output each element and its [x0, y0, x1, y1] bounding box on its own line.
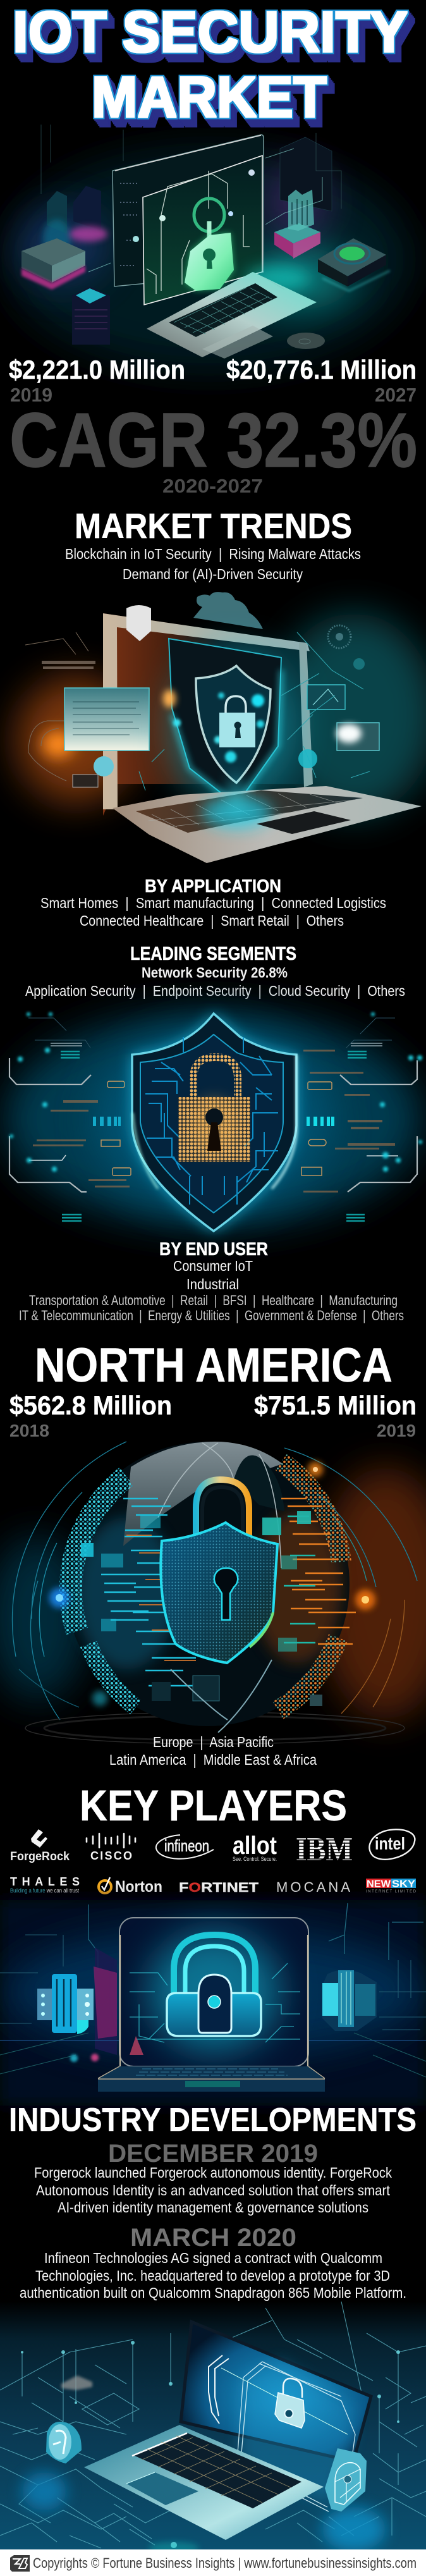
panel: by end user [19, 1239, 404, 1323]
logo: Norton: Norton [115, 1878, 162, 1896]
development 1 line 2: Autonomous Identity is an advanced solution that offers smart [36, 2182, 391, 2199]
heading: by end user: BY END USER [159, 1239, 268, 1260]
end user: industrial: Industrial [186, 1276, 239, 1292]
other regions line 2: Latin America | Middle East & Africa [109, 1751, 317, 1768]
logo: IBM: IBM [296, 1831, 353, 1868]
logo: Mocana: MOCANA [276, 1879, 350, 1895]
logo: Fortinet: FORTINET [179, 1880, 259, 1895]
logo: New Sky: SKY [392, 1879, 415, 1889]
title line 1: IOT SECURITY [13, 0, 408, 64]
panel: market trends [65, 506, 361, 582]
illustration: globe with padlock [0, 1442, 426, 1744]
logo: Infineon: infineon [164, 1836, 209, 1855]
heading: key players: KEY PLAYERS [80, 1781, 347, 1830]
logo: Thales: Building a future we can all trust [10, 1887, 79, 1894]
logo: Thales [10, 1875, 80, 1894]
logo: Norton [99, 1877, 162, 1896]
year 2019: 2019 [10, 384, 52, 406]
panel: by application [40, 876, 386, 929]
panel: leading segments [25, 943, 405, 999]
year 2027: 2027 [375, 384, 417, 406]
illustration: laptop with green padlock [6, 125, 411, 370]
illustration: shield on laptop [16, 592, 426, 863]
heading: by application: BY APPLICATION [145, 876, 281, 897]
stat 2019 value: $751.5 Million [254, 1390, 417, 1420]
CAGR period: 2020-2027 [162, 475, 263, 497]
logo: Cisco [87, 1834, 135, 1862]
leading segment value: Network Security 26.8% [142, 964, 288, 981]
title line 2 wrapper: MARKET [92, 65, 327, 130]
end user: consumer: Consumer IoT [173, 1258, 253, 1274]
other regions line 1: Europe | Asia Pacific [153, 1734, 274, 1750]
logo: intel [369, 1829, 415, 1860]
panel: hero [6, 0, 411, 370]
date: december 2019: DECEMBER 2019 [108, 2140, 318, 2168]
footer logo [10, 2555, 30, 2572]
stat 2019 value: $2,221.0 Million [9, 355, 185, 384]
logo: Thales: THALES [10, 1875, 80, 1888]
year 2018: 2018 [9, 1421, 49, 1440]
logo: New Sky: NEW [367, 1879, 391, 1889]
logo: New Sky [366, 1879, 417, 1894]
logo: intel: intel [375, 1834, 405, 1853]
date: march 2020: MARCH 2020 [130, 2224, 296, 2252]
logo: New Sky: INTERNET LIMITED [366, 1890, 417, 1894]
panel: key players [10, 1781, 417, 1896]
stat 2018 value: $562.8 Million [9, 1390, 172, 1420]
logo: allot: allot [233, 1832, 277, 1860]
logo: Cisco: CISCO [90, 1849, 132, 1862]
trends line 1: Blockchain in IoT Security | Rising Malware Attacks [65, 546, 361, 562]
panel: market size [9, 355, 417, 497]
logo: ForgeRock [10, 1829, 70, 1863]
logo: ForgeRock: ForgeRock [10, 1850, 70, 1863]
footer [0, 2549, 426, 2576]
heading: leading segments: LEADING SEGMENTS [130, 943, 296, 964]
application line 2: Connected Healthcare | Smart Retail | Others [80, 912, 344, 929]
development 1 line 3: AI-driven identity management & governance solutions [58, 2199, 368, 2216]
logo: Infineon [156, 1835, 214, 1859]
application line 1: Smart Homes | Smart manufacturing | Connected Logistics [40, 895, 386, 911]
trends line 2: Demand for (AI)-Driven Security [123, 566, 303, 582]
logo: allot: See. Control. Secure. [233, 1856, 277, 1862]
panel: north america [0, 1339, 426, 1768]
heading: market trends: MARKET TRENDS [75, 506, 352, 546]
illustration: circuit shield with golden padlock [4, 1012, 422, 1231]
illustration: laptop on circuit board [0, 2302, 426, 2555]
year 2019: 2019 [377, 1421, 416, 1440]
illustration: padlock on laptop screen [0, 1900, 426, 2106]
development 2 line 1: Infineon Technologies AG signed a contract with Qualcomm [44, 2250, 382, 2266]
panel: industry developments [9, 2102, 417, 2301]
